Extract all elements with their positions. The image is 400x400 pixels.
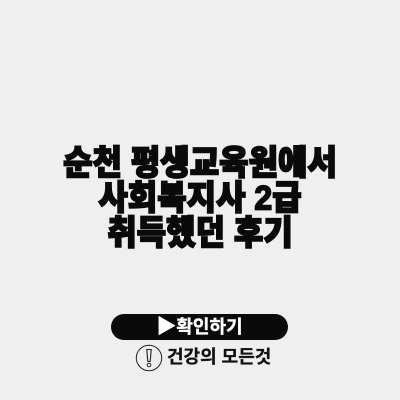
- button: confirm: ▶확인하기: [156, 316, 243, 338]
- brand label: 건강의 모든것: [167, 347, 271, 367]
- title: 사회복지사 2급: [98, 179, 302, 217]
- title: 순천 평생교육원에서: [63, 144, 337, 182]
- title: [63, 144, 337, 252]
- button: confirm: [111, 314, 288, 340]
- title: 취득했던 후기: [107, 214, 293, 252]
- icon: exclamation circle: [136, 344, 162, 372]
